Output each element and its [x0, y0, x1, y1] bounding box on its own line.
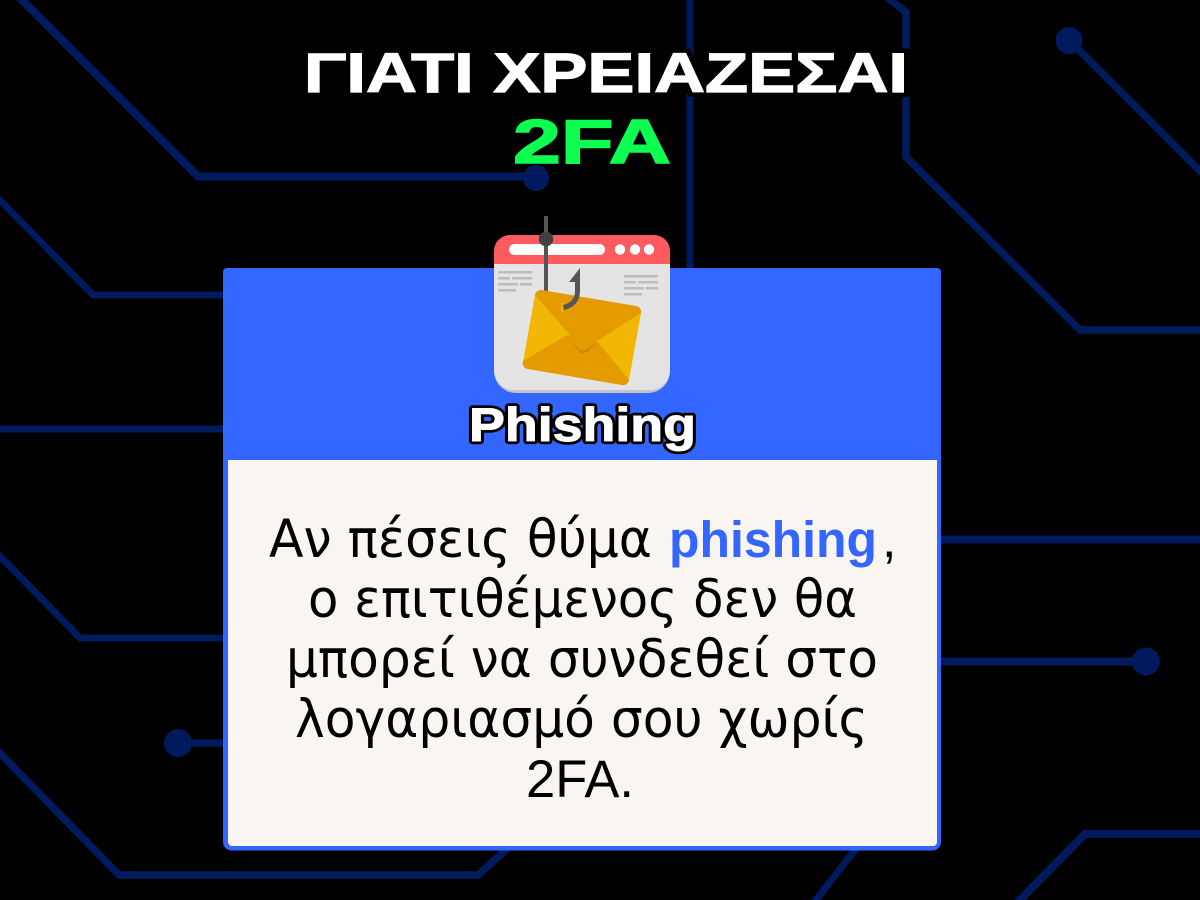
title accent: 2FA: 2FA	[513, 108, 671, 177]
body text: μπορεί να συνδεθεί στο	[286, 629, 878, 690]
label: Phishing: Phishing	[469, 398, 696, 451]
body text: λογαριασμό σου χωρίς	[295, 689, 868, 750]
hook	[563, 268, 580, 310]
body text: Αν πέσεις θύμα	[269, 509, 652, 570]
panel body	[228, 460, 937, 846]
body text: ,	[882, 511, 896, 569]
envelope	[523, 290, 641, 385]
body text	[269, 509, 896, 809]
body text: 2FA.	[526, 750, 634, 809]
body text: phishing	[669, 511, 877, 568]
fishing line	[539, 216, 553, 292]
panel: phishing card	[223, 268, 941, 850]
title: ΓΙΑΤΙ ΧΡΕΙΑΖΕΣΑΙ	[304, 41, 908, 104]
label: Phishing: Phishing	[469, 398, 696, 451]
title: ΓΙΑΤΙ ΧΡΕΙΑΖΕΣΑΙ	[304, 41, 908, 104]
body text: ο επιτιθέμενος δεν θα	[308, 569, 857, 630]
icon: phishing hook on email in browser window	[494, 216, 670, 393]
title	[304, 41, 908, 177]
